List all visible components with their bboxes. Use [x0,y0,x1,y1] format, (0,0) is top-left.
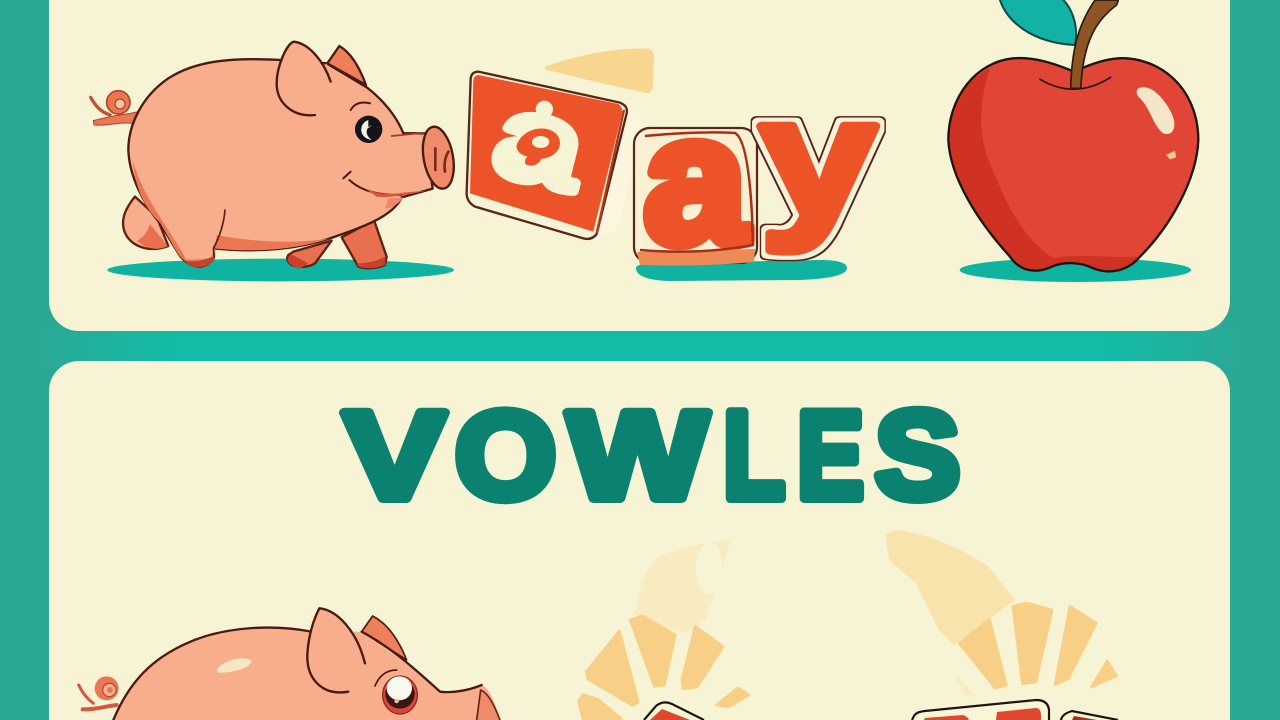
title: V [344,387,445,525]
icon: shadow under letters [636,260,847,281]
icon: pig lower [79,608,500,720]
icon: letter y: y [760,63,876,253]
icon: bottom letter tiles [912,700,1118,720]
icon: pig walking [91,42,458,281]
title: O [455,386,556,524]
title: S [875,386,960,525]
panel: bottom card [49,361,1230,720]
title: L [723,386,785,525]
icon: apple [948,0,1198,282]
teal band between panels [30,325,1250,367]
title: E [797,386,864,524]
icon: croissant rays left [579,540,749,719]
icon: letter tile a: a [644,77,749,281]
icon: croissant rays right [885,530,1116,697]
title [344,386,960,525]
title: W [568,386,708,524]
icon: tilted letter tile with a: a [483,66,599,217]
icon: tilted letter tile with a [466,48,654,240]
panel: top card [49,0,1230,331]
icon: bottom tilted tile [644,702,704,720]
